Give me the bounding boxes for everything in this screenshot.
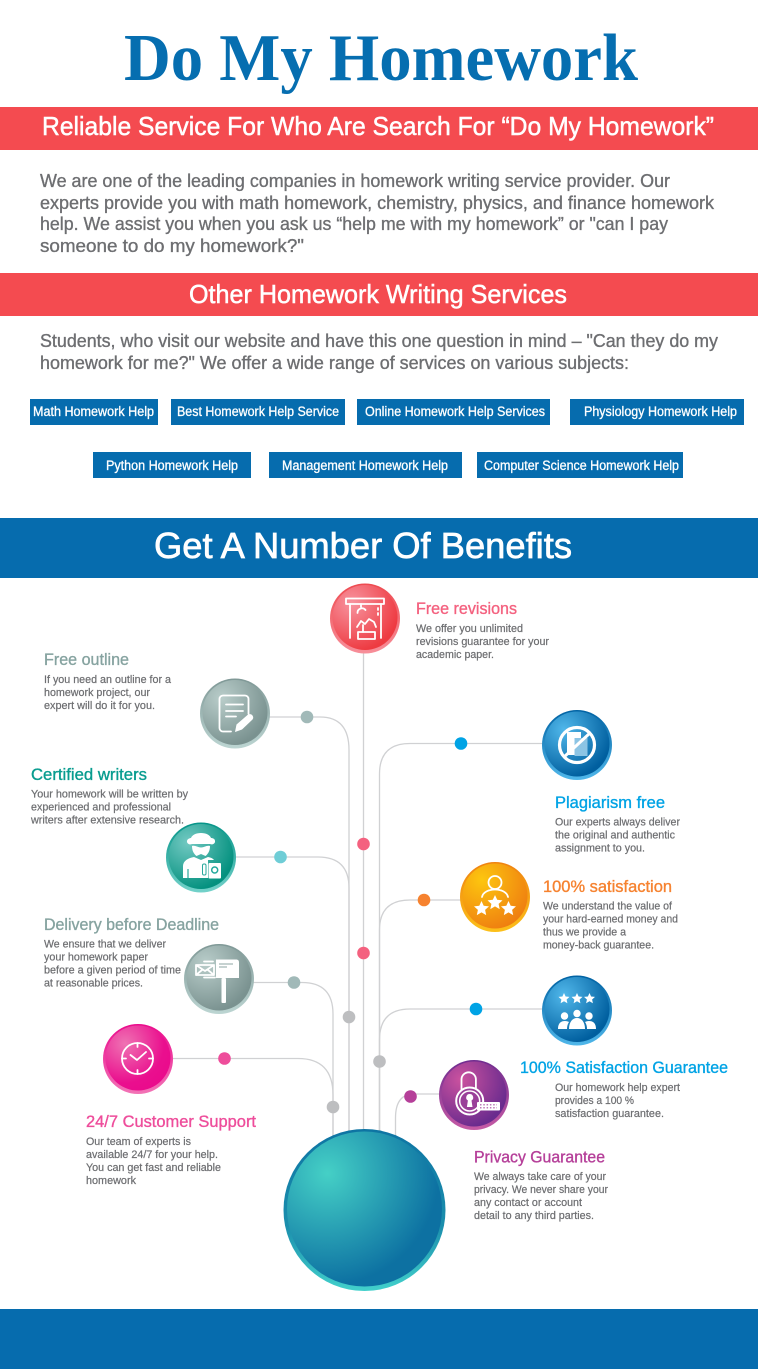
button: physiology [570, 399, 744, 425]
button: best [171, 399, 345, 425]
intro paragraph: experts provide you with math homework, chemistry, physics, and finance homework [40, 192, 715, 213]
satisfaction guarantee text: Our homework help expert [555, 1082, 680, 1094]
free revisions text [416, 600, 549, 661]
delivery before deadline text [44, 916, 219, 990]
button: computer science: Computer Science Homework Help [484, 458, 679, 473]
icon: satisfaction guarantee [542, 976, 612, 1046]
button: physiology: Physiology Homework Help [584, 404, 737, 419]
plagiarism free text [555, 794, 680, 854]
intro paragraph: someone to do my homework?" [40, 235, 304, 256]
button: management: Management Homework Help [282, 458, 448, 473]
icon: 24/7 customer support [103, 1024, 173, 1094]
button: online [357, 399, 550, 425]
free outline text: expert will do it for you. [44, 700, 155, 712]
privacy guarantee text [474, 1149, 608, 1222]
100% satisfaction text: thus we provide a [543, 926, 627, 938]
free revisions text: revisions guarantee for your [416, 636, 549, 648]
privacy guarantee text: any contact or account [474, 1197, 582, 1209]
button: math [30, 399, 158, 425]
icon: privacy guarantee [439, 1060, 509, 1130]
benefits banner: Get A Number Of Benefits [154, 525, 572, 566]
certified writers text: writers after extensive research. [30, 814, 184, 826]
satisfaction guarantee text: satisfaction guarantee. [555, 1108, 664, 1120]
icon: certified writers [166, 822, 236, 892]
certified writers text [30, 766, 189, 826]
delivery before deadline text: Delivery before Deadline [44, 916, 219, 934]
services paragraph: Students, who visit our website and have this one question in mind – "Can they do my [40, 330, 719, 351]
title: Do My Homework [124, 21, 639, 95]
icon: 100% satisfaction [460, 862, 530, 932]
button: math: Math Homework Help [33, 404, 154, 419]
button: computer science [477, 452, 683, 478]
free outline text: homework project, our [44, 687, 150, 699]
connector lines [170, 650, 544, 1140]
service buttons [30, 399, 744, 478]
free outline text: Free outline [44, 651, 129, 669]
intro paragraph: help. We assist you when you ask us “help me with my homework” or "can I pay [40, 213, 669, 234]
24/7 customer support text: Our team of experts is [86, 1136, 192, 1148]
plagiarism free text: the original and authentic [555, 830, 676, 842]
certified writers text: Your homework will be written by [31, 788, 189, 800]
plagiarism free text: Plagiarism free [555, 794, 665, 812]
100% satisfaction text: money-back guarantee. [543, 940, 654, 952]
icon: free revisions [330, 584, 400, 654]
24/7 customer support text: 24/7 Customer Support [86, 1113, 256, 1131]
benefits banner [0, 518, 758, 578]
satisfaction guarantee text [520, 1059, 728, 1120]
privacy guarantee text: detail to any third parties. [474, 1210, 594, 1222]
free revisions text: academic paper. [416, 649, 494, 661]
certified writers text: experienced and professional [31, 802, 171, 814]
button: python: Python Homework Help [106, 458, 238, 473]
24/7 customer support text [86, 1113, 256, 1187]
24/7 customer support text: You can get fast and reliable [86, 1162, 221, 1174]
free outline text: If you need an outline for a [44, 674, 172, 686]
delivery before deadline text: We ensure that we deliver [44, 939, 166, 951]
footer band [0, 1309, 758, 1369]
delivery before deadline text: before a given period of time [44, 965, 181, 977]
services paragraph [40, 330, 719, 373]
central circle [284, 1129, 446, 1291]
button: best: Best Homework Help Service [177, 404, 339, 419]
privacy guarantee text: privacy. We never share your [474, 1184, 608, 1196]
privacy guarantee text: We always take care of your [474, 1171, 606, 1183]
24/7 customer support text: available 24/7 for your help. [86, 1149, 218, 1161]
icon: plagiarism free [542, 710, 612, 780]
100% satisfaction text [543, 878, 678, 952]
button: python [93, 452, 251, 478]
100% satisfaction text: 100% satisfaction [543, 878, 672, 896]
banner: other services: Other Homework Writing Services [189, 279, 567, 309]
free revisions text: We offer you unlimited [416, 623, 523, 635]
icon: free outline [200, 678, 270, 748]
services paragraph: homework for me?" We offer a wide range of services on various subjects: [40, 352, 629, 373]
satisfaction guarantee text: 100% Satisfaction Guarantee [520, 1059, 728, 1077]
intro paragraph [40, 170, 715, 256]
satisfaction guarantee text: provides a 100 % [555, 1095, 634, 1107]
banner: reliable service: Reliable Service For Who Are Search For “Do My Homework” [42, 111, 714, 141]
plagiarism free text: assignment to you. [555, 842, 645, 854]
plagiarism free text: Our experts always deliver [555, 816, 680, 828]
banner: reliable service [0, 107, 758, 150]
button: online: Online Homework Help Services [365, 404, 545, 419]
intro paragraph: We are one of the leading companies in homework writing service provider. Our [40, 170, 670, 191]
connector dots [218, 711, 482, 1113]
banner: other services [0, 273, 758, 316]
100% satisfaction text: We understand the value of [543, 900, 673, 912]
free outline text [44, 651, 172, 712]
24/7 customer support text: homework [86, 1175, 137, 1187]
button: management [269, 452, 462, 478]
free revisions text: Free revisions [416, 600, 517, 618]
certified writers text: Certified writers [31, 766, 147, 784]
privacy guarantee text: Privacy Guarantee [474, 1149, 605, 1167]
100% satisfaction text: your hard-earned money and [543, 914, 678, 926]
icon: delivery before deadline [184, 944, 254, 1014]
delivery before deadline text: at reasonable prices. [44, 978, 143, 990]
delivery before deadline text: your homework paper [44, 952, 148, 964]
